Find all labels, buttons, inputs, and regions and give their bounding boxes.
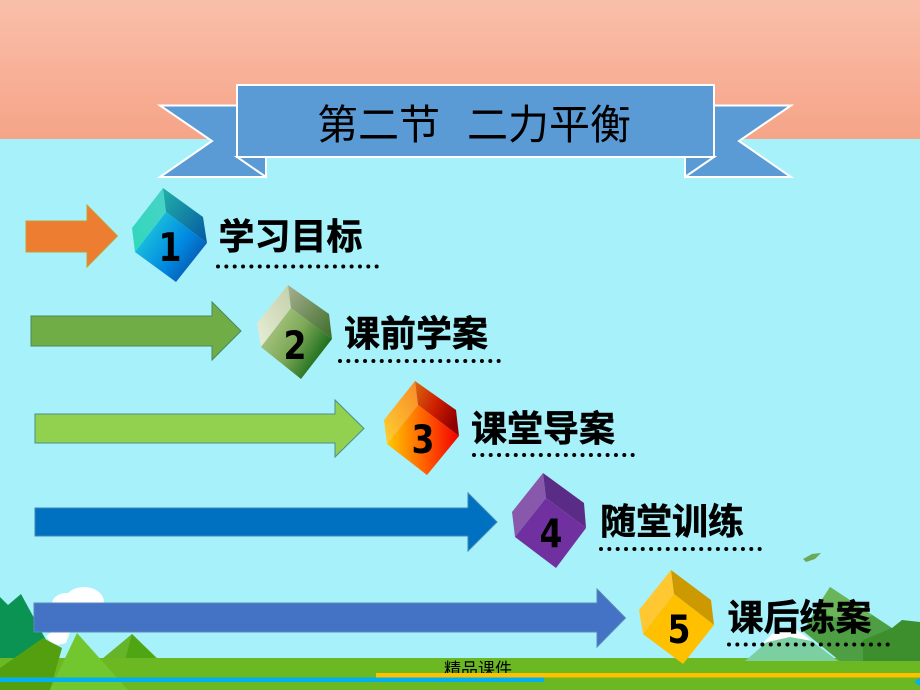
cube 1 xyxy=(132,188,207,282)
ribbon right tail xyxy=(685,106,791,177)
dotted underline 5 xyxy=(729,642,888,646)
dotted underline 2 xyxy=(340,359,499,363)
item 1 xyxy=(26,188,377,282)
ground strip xyxy=(0,658,920,690)
cube 3: 3 xyxy=(412,418,434,463)
dotted underline 1 xyxy=(218,264,377,268)
item 2 xyxy=(31,285,499,379)
cube 3 xyxy=(384,381,459,475)
top coral band xyxy=(0,0,920,139)
left fold xyxy=(237,157,266,177)
arrow 3 xyxy=(35,400,364,457)
heading 4: 随堂训练 xyxy=(600,501,744,542)
right fold xyxy=(685,157,714,177)
footer yellow line xyxy=(376,673,920,678)
left landscape xyxy=(0,587,158,670)
arrow 4 xyxy=(35,493,497,551)
footer caption: 精品课件 xyxy=(444,660,512,679)
cube 4: 4 xyxy=(540,512,562,557)
right landscape xyxy=(745,553,920,661)
heading 3: 课堂导案 xyxy=(471,408,615,449)
ribbon main panel xyxy=(237,85,714,157)
left dark hill base xyxy=(0,638,62,690)
item 3 xyxy=(35,381,633,475)
arrow 5 xyxy=(34,589,626,647)
dotted underline 4 xyxy=(601,547,760,551)
title ribbon xyxy=(160,85,791,177)
title text part two: 二力平衡 xyxy=(467,102,631,148)
foreground hill xyxy=(50,633,128,690)
cube 5: 5 xyxy=(668,608,690,653)
footer blue line xyxy=(0,678,544,682)
cube 2 xyxy=(257,285,332,379)
heading 1: 学习目标 xyxy=(218,216,363,257)
heading 5: 课后练案 xyxy=(728,597,872,638)
title text: 第二节 xyxy=(317,102,440,148)
cube 2: 2 xyxy=(284,324,306,369)
heading 2: 课前学案 xyxy=(344,313,488,354)
cube 5 xyxy=(639,570,714,664)
cube 1: 1 xyxy=(158,226,182,271)
corner marker xyxy=(914,678,920,686)
item 5 xyxy=(34,570,888,664)
item 4 xyxy=(35,473,760,568)
cube 4 xyxy=(512,473,586,568)
arrow 1 xyxy=(26,205,118,267)
dotted underline 3 xyxy=(474,453,633,457)
arrow 2 xyxy=(31,302,241,360)
ribbon left tail xyxy=(160,106,266,177)
